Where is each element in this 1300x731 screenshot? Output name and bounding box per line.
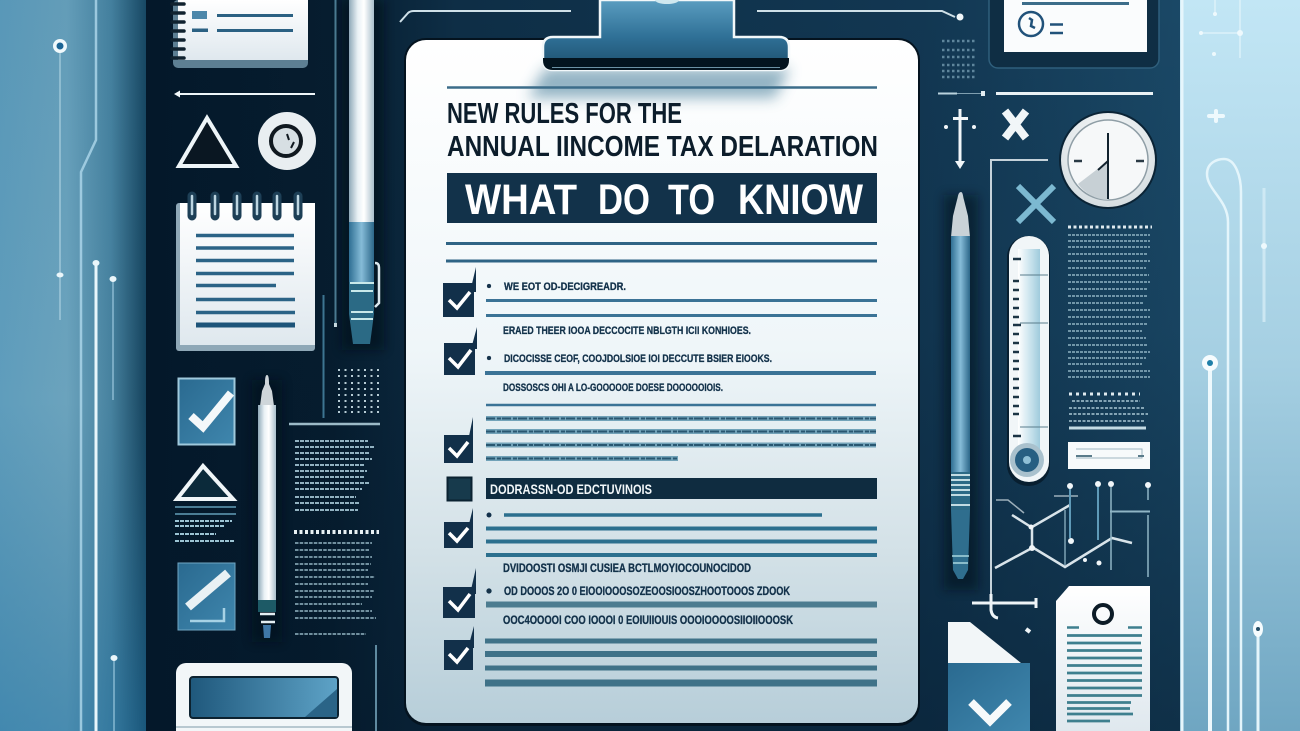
clock bbox=[1059, 111, 1157, 209]
checkbox six bbox=[444, 626, 474, 670]
icon: triangle upper bbox=[179, 118, 236, 166]
checkbox one bbox=[443, 267, 476, 317]
icon: triangle lower bbox=[177, 466, 233, 499]
connector left top bbox=[400, 11, 571, 22]
banner: what do to know: DO bbox=[598, 176, 650, 224]
icon: white x bbox=[1005, 111, 1026, 138]
micro text block left bbox=[289, 424, 380, 634]
banner: what do to know: WHAT bbox=[465, 176, 577, 224]
network diagram bbox=[995, 481, 1151, 577]
checklist text one: DOSSOSCS OHI A LO-GOOOOOE DOESE DOOOOOIOIS. bbox=[503, 382, 723, 394]
pen upper left bbox=[342, 0, 384, 350]
title bbox=[447, 98, 878, 163]
tablet card bbox=[989, 0, 1159, 68]
section rules bbox=[486, 512, 877, 555]
banner: what do to know: KNIOW bbox=[738, 176, 863, 224]
connector right top bbox=[757, 11, 964, 20]
dot grid left bbox=[338, 370, 380, 412]
divider right bbox=[938, 91, 1153, 96]
section text bbox=[486, 561, 793, 627]
clipboard clip bbox=[543, 0, 789, 70]
folder with chevron bbox=[948, 622, 1030, 731]
right background band bbox=[1180, 0, 1300, 731]
stylus left bbox=[252, 375, 282, 642]
L bracket line bbox=[991, 160, 1048, 598]
checklist text one bbox=[487, 281, 772, 394]
thermometer ruler bbox=[1007, 236, 1050, 486]
micro text block right bbox=[1068, 227, 1152, 428]
document page bbox=[1056, 586, 1150, 731]
section text: DVIDOOSTI OSMJI CUSIEA BCTLMOYIOCOUNOCIDOD bbox=[503, 561, 751, 575]
clipboard sheet bbox=[404, 38, 920, 726]
icon: blue x bbox=[1018, 186, 1054, 222]
checkbox tile upper bbox=[178, 378, 234, 444]
bottom rules bbox=[485, 604, 877, 683]
section text: OD DOOOS 2O 0 EIOOIOOOSOZEOOSIOOSZHOOTOOOS ZDOOK bbox=[504, 584, 790, 598]
top rule bbox=[447, 86, 877, 89]
section bar: DODRASSN-OD EDCTUVINOIS bbox=[490, 481, 652, 497]
icon: dagger cross bbox=[944, 109, 976, 169]
dark central panel bbox=[146, 0, 1180, 731]
section text: OOC4OOOOI COO IOOOI 0 EOIUIIOUIS OOOIOOOOSIIOIIOOOSK bbox=[503, 613, 793, 627]
checklist item group one bbox=[443, 267, 877, 375]
banner: what do to know bbox=[447, 173, 877, 224]
checkbox five bbox=[443, 568, 476, 618]
calculator bbox=[176, 663, 352, 731]
thin vertical rule with end dot bbox=[324, 0, 337, 418]
checkbox three bbox=[444, 417, 473, 463]
notepad top left bbox=[172, 0, 308, 68]
checkbox four bbox=[444, 508, 473, 548]
checkbox two bbox=[444, 327, 477, 375]
pen right bbox=[944, 192, 978, 590]
icon: round button bbox=[258, 112, 316, 170]
clip shadow on sheet bbox=[528, 68, 790, 98]
section bar bbox=[486, 478, 877, 499]
rules one bbox=[486, 300, 877, 316]
checklist text one: ERAED THEER IOOA DECCOCITE NBLGTH ICII KONHIOES. bbox=[503, 325, 751, 337]
crosshair bbox=[972, 594, 1036, 632]
checklist text one: DICOCISSE CEOF, COOJDOLSIOE IOI DECCUTE BSIER EIOOKS. bbox=[504, 353, 772, 365]
micro dots top right bbox=[942, 41, 975, 77]
left background band bbox=[0, 0, 148, 731]
header rules bbox=[446, 244, 877, 261]
title: ANNUAL IINCOME TAX DELARATION bbox=[447, 131, 878, 163]
banner: what do to know: TO bbox=[668, 176, 715, 224]
checklist text one: WE EOT OD-DECIGREADR. bbox=[504, 281, 626, 293]
arrow left bbox=[174, 90, 315, 98]
empty checkbox bbox=[448, 478, 472, 500]
notepad with ruled lines bbox=[176, 196, 315, 351]
small white label bbox=[1068, 442, 1150, 469]
pencil tile lower bbox=[178, 563, 235, 630]
rules and dense paragraph bbox=[485, 373, 876, 458]
title: NEW RULES FOR THE bbox=[447, 98, 682, 130]
small caption left bbox=[175, 507, 236, 541]
